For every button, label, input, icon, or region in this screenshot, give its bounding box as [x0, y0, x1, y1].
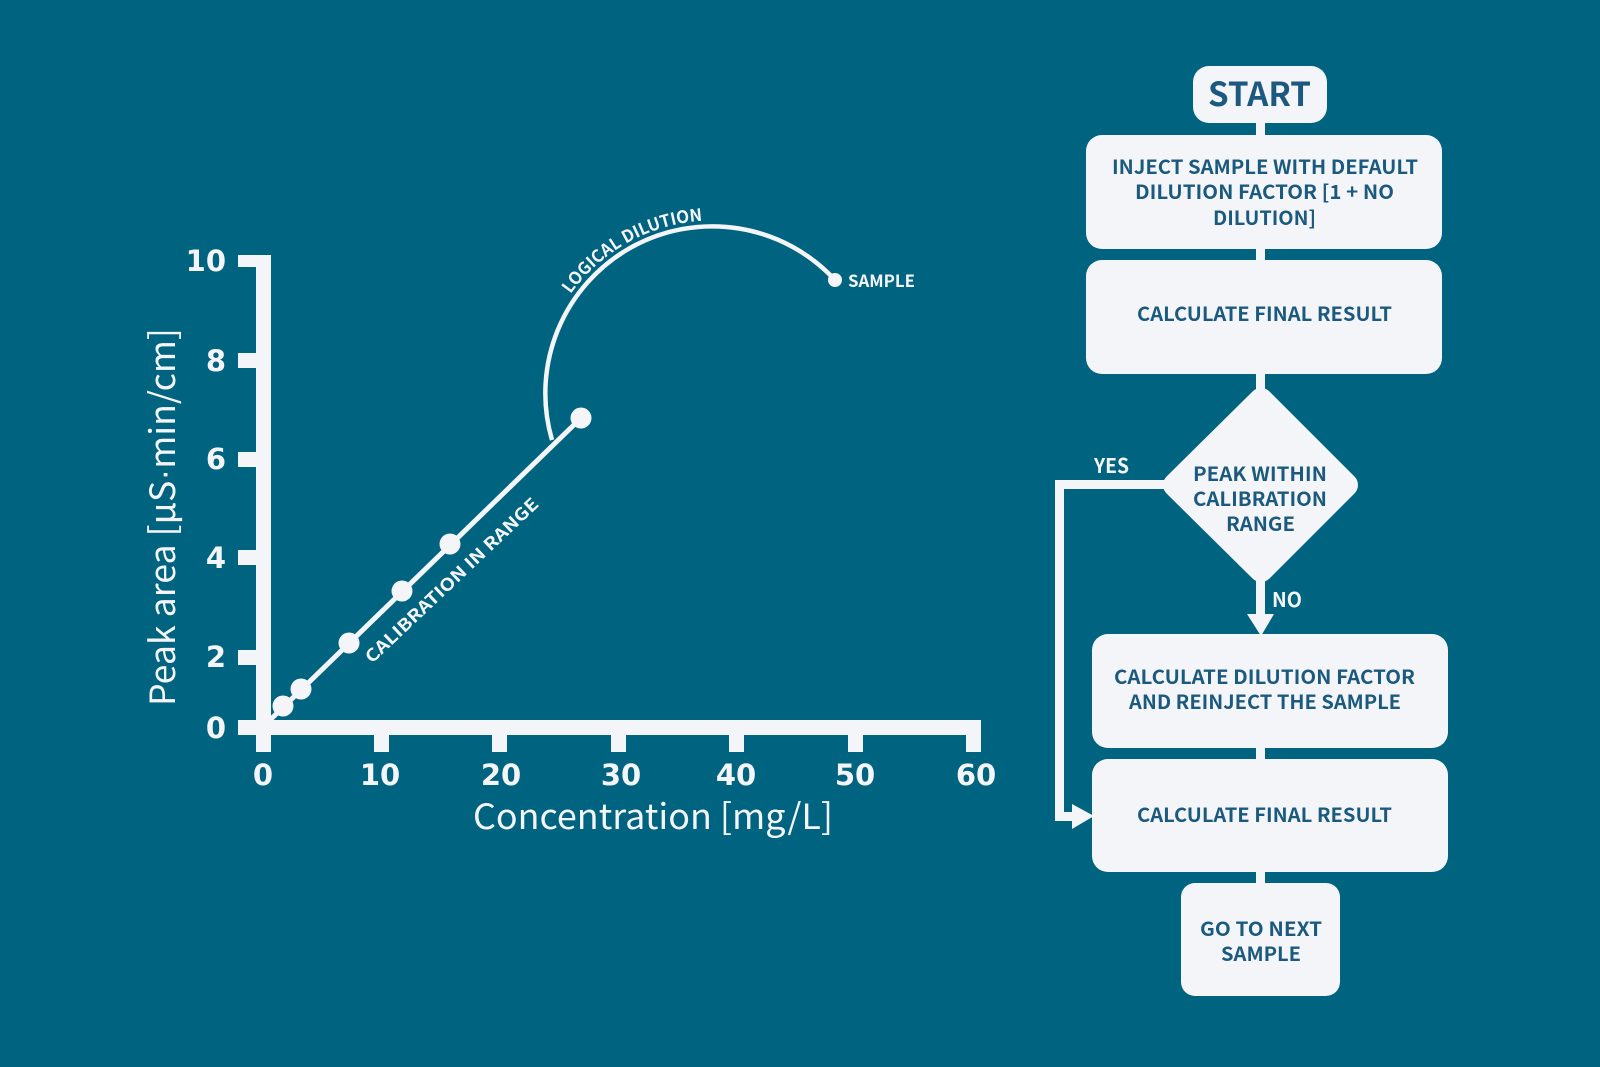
calculate final result box: CALCULATE FINAL RESULT [1137, 298, 1392, 327]
go to next sample box: GO TO NEXT [1200, 913, 1322, 942]
inject sample box: DILUTION] [1213, 202, 1316, 231]
x axis numbers: 50 [835, 758, 875, 792]
calculate final result box [1086, 260, 1442, 374]
x axis numbers: 0 [253, 758, 273, 792]
decision diamond [1175, 400, 1346, 570]
inject sample box: INJECT SAMPLE WITH DEFAULT [1112, 151, 1418, 180]
y axis title: Peak area [µS·min/cm] [135, 328, 186, 706]
y axis numbers: 6 [206, 442, 226, 476]
calculate dilution factor box [1092, 634, 1448, 748]
sample label: SAMPLE [848, 267, 915, 292]
logical dilution label: LOGICAL DILUTION [561, 208, 701, 293]
x axis numbers: 10 [360, 758, 400, 792]
start box: START [1208, 68, 1311, 116]
go to next sample box [1181, 883, 1340, 996]
calibration line [268, 418, 581, 722]
x axis numbers: 60 [956, 758, 996, 792]
x axis numbers [253, 758, 996, 792]
calculate dilution factor box: AND REINJECT THE SAMPLE [1128, 686, 1401, 715]
calibration points [272, 408, 592, 716]
panel: calibration chart [135, 208, 996, 840]
x axis numbers: 20 [481, 758, 521, 792]
y axis numbers: 4 [206, 541, 226, 575]
decision diamond: CALIBRATION [1193, 483, 1327, 512]
go to next sample box: SAMPLE [1221, 938, 1301, 967]
panel: flowchart [1055, 66, 1448, 996]
inject sample box [1086, 135, 1442, 249]
no label: NO [1272, 584, 1302, 613]
calculate dilution factor box: CALCULATE DILUTION FACTOR [1114, 661, 1415, 690]
x axis numbers: 40 [716, 758, 756, 792]
x axis numbers: 30 [601, 758, 641, 792]
y axis numbers: 0 [206, 711, 226, 745]
sample point [828, 273, 842, 287]
yes label: YES [1093, 450, 1129, 479]
arrow: no branch [1247, 614, 1274, 636]
decision diamond: PEAK WITHIN [1193, 458, 1327, 487]
calculate final result box 2: CALCULATE FINAL RESULT [1137, 799, 1392, 828]
y axis numbers: 10 [186, 244, 226, 278]
calibration label: CALIBRATION IN RANGE [358, 491, 543, 668]
connectors [1256, 120, 1265, 888]
y axis numbers: 2 [206, 640, 226, 674]
y axis numbers: 8 [206, 344, 226, 378]
chart axes and ticks [238, 255, 981, 752]
start box [1193, 66, 1327, 123]
decision diamond: RANGE [1226, 508, 1295, 537]
y axis numbers [186, 244, 226, 745]
arrow: yes branch [1055, 480, 1167, 829]
calculate final result box 2 [1092, 759, 1448, 872]
x axis title: Concentration [mg/L] [473, 789, 833, 840]
inject sample box: DILUTION FACTOR [1 + NO [1135, 176, 1394, 205]
logical dilution arc [545, 226, 835, 440]
